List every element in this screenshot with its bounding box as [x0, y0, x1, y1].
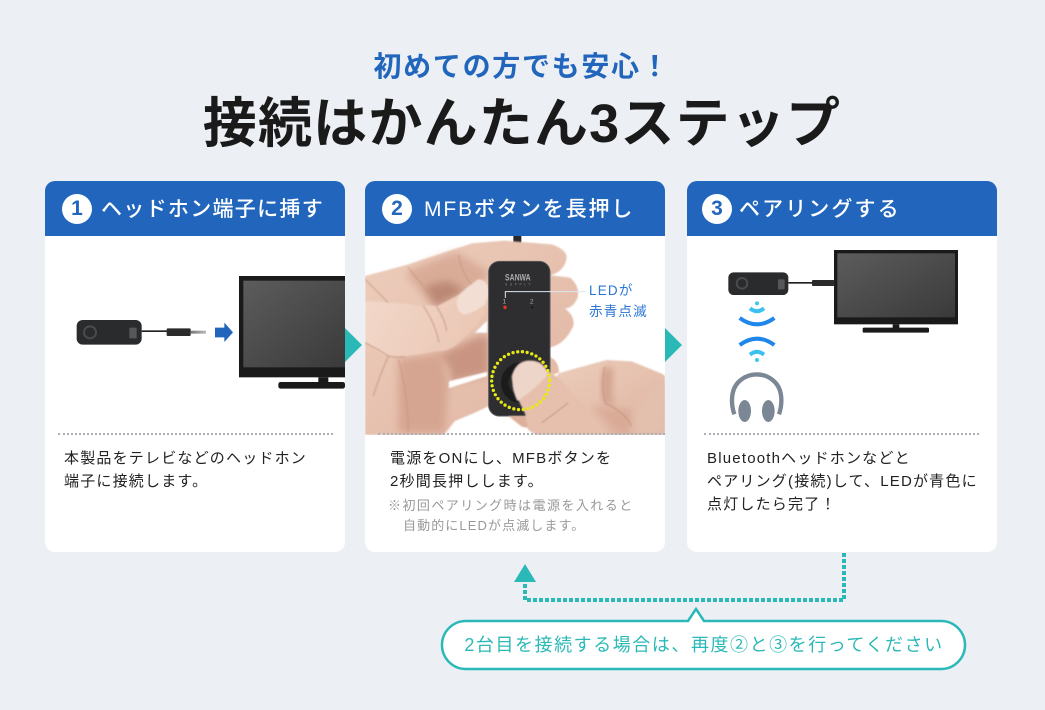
step 1 header	[45, 181, 345, 236]
arrow: step 1 to 2	[345, 328, 362, 362]
gaps between fingers	[449, 372, 487, 388]
title: 接続はかんたん3ステップ	[203, 94, 841, 154]
LED leader line	[505, 292, 585, 298]
step 3 description: 点灯したら完了！	[707, 496, 837, 513]
left hand	[365, 241, 578, 435]
subtitle: 初めての方でも安心！	[373, 51, 670, 82]
step 1 description: 端子に接続します。	[64, 473, 208, 490]
step 1 description: 本製品をテレビなどのヘッドホン	[64, 450, 307, 467]
step 3 number	[702, 194, 732, 224]
icon: wireless signal up	[740, 301, 774, 324]
icon: headphones	[732, 374, 781, 422]
photo: hand pressing button: 1	[502, 298, 506, 305]
photo: hand pressing button	[365, 236, 665, 435]
step 2 note: ※初回ペアリング時は電源を入れると	[388, 498, 634, 513]
step 2 description: 電源をONにし、MFBボタンを	[390, 450, 612, 467]
TV	[834, 250, 958, 333]
divider	[704, 433, 979, 435]
illustration: pairing	[728, 250, 958, 422]
step 2 description: 2秒間長押しします。	[390, 473, 544, 490]
photo: hand pressing button: 2	[530, 298, 534, 305]
illustration: transmitter and TV	[76, 276, 345, 389]
panel: step 1	[45, 181, 345, 552]
photo: hand pressing button: SUPPLY	[505, 283, 531, 287]
step 3 description: Bluetoothヘッドホンなどと	[707, 450, 911, 467]
icon: wireless signal down	[740, 339, 774, 362]
step 3 header	[687, 181, 997, 236]
arrow: return loop	[514, 553, 846, 602]
step 2 heading: MFBボタンを長押し	[424, 198, 634, 221]
step 3 description: ペアリング(接続)して、LEDが青色に	[707, 473, 978, 490]
panel: step 2	[365, 181, 665, 552]
step 1 number: 1	[71, 197, 83, 220]
finger under device	[508, 416, 535, 429]
step 1 number	[62, 194, 92, 224]
transmitter	[728, 272, 834, 295]
right hand	[532, 360, 665, 435]
divider	[378, 433, 665, 435]
LED callout	[589, 283, 648, 319]
panel: step 3	[687, 181, 997, 552]
thumb pressing button	[512, 361, 608, 435]
LED callout: LEDが	[589, 283, 634, 298]
thumb	[365, 279, 489, 356]
step 2 number: 2	[391, 197, 403, 220]
callout text: 2台目を接続する場合は、再度②と③を行ってください	[464, 635, 944, 655]
step 2 note: 自動的にLEDが点滅します。	[403, 518, 585, 533]
step 3 heading: ペアリングする	[739, 198, 901, 221]
divider	[58, 433, 333, 435]
photo: hand pressing button: SANWA	[505, 273, 531, 283]
step 1 description	[64, 450, 307, 490]
step 2 number	[382, 194, 412, 224]
arrow: step 2 to 3	[665, 328, 682, 362]
step 2 note	[388, 498, 634, 533]
step 1 heading: ヘッドホン端子に挿す	[101, 198, 324, 221]
step 3 description	[707, 450, 978, 513]
step 2 description	[390, 450, 612, 490]
step 3 number: 3	[711, 197, 723, 220]
callout	[440, 606, 966, 670]
device	[489, 261, 550, 416]
highlight circle	[492, 352, 550, 410]
step 2 header	[365, 181, 665, 236]
LED callout: 赤青点滅	[589, 304, 648, 319]
